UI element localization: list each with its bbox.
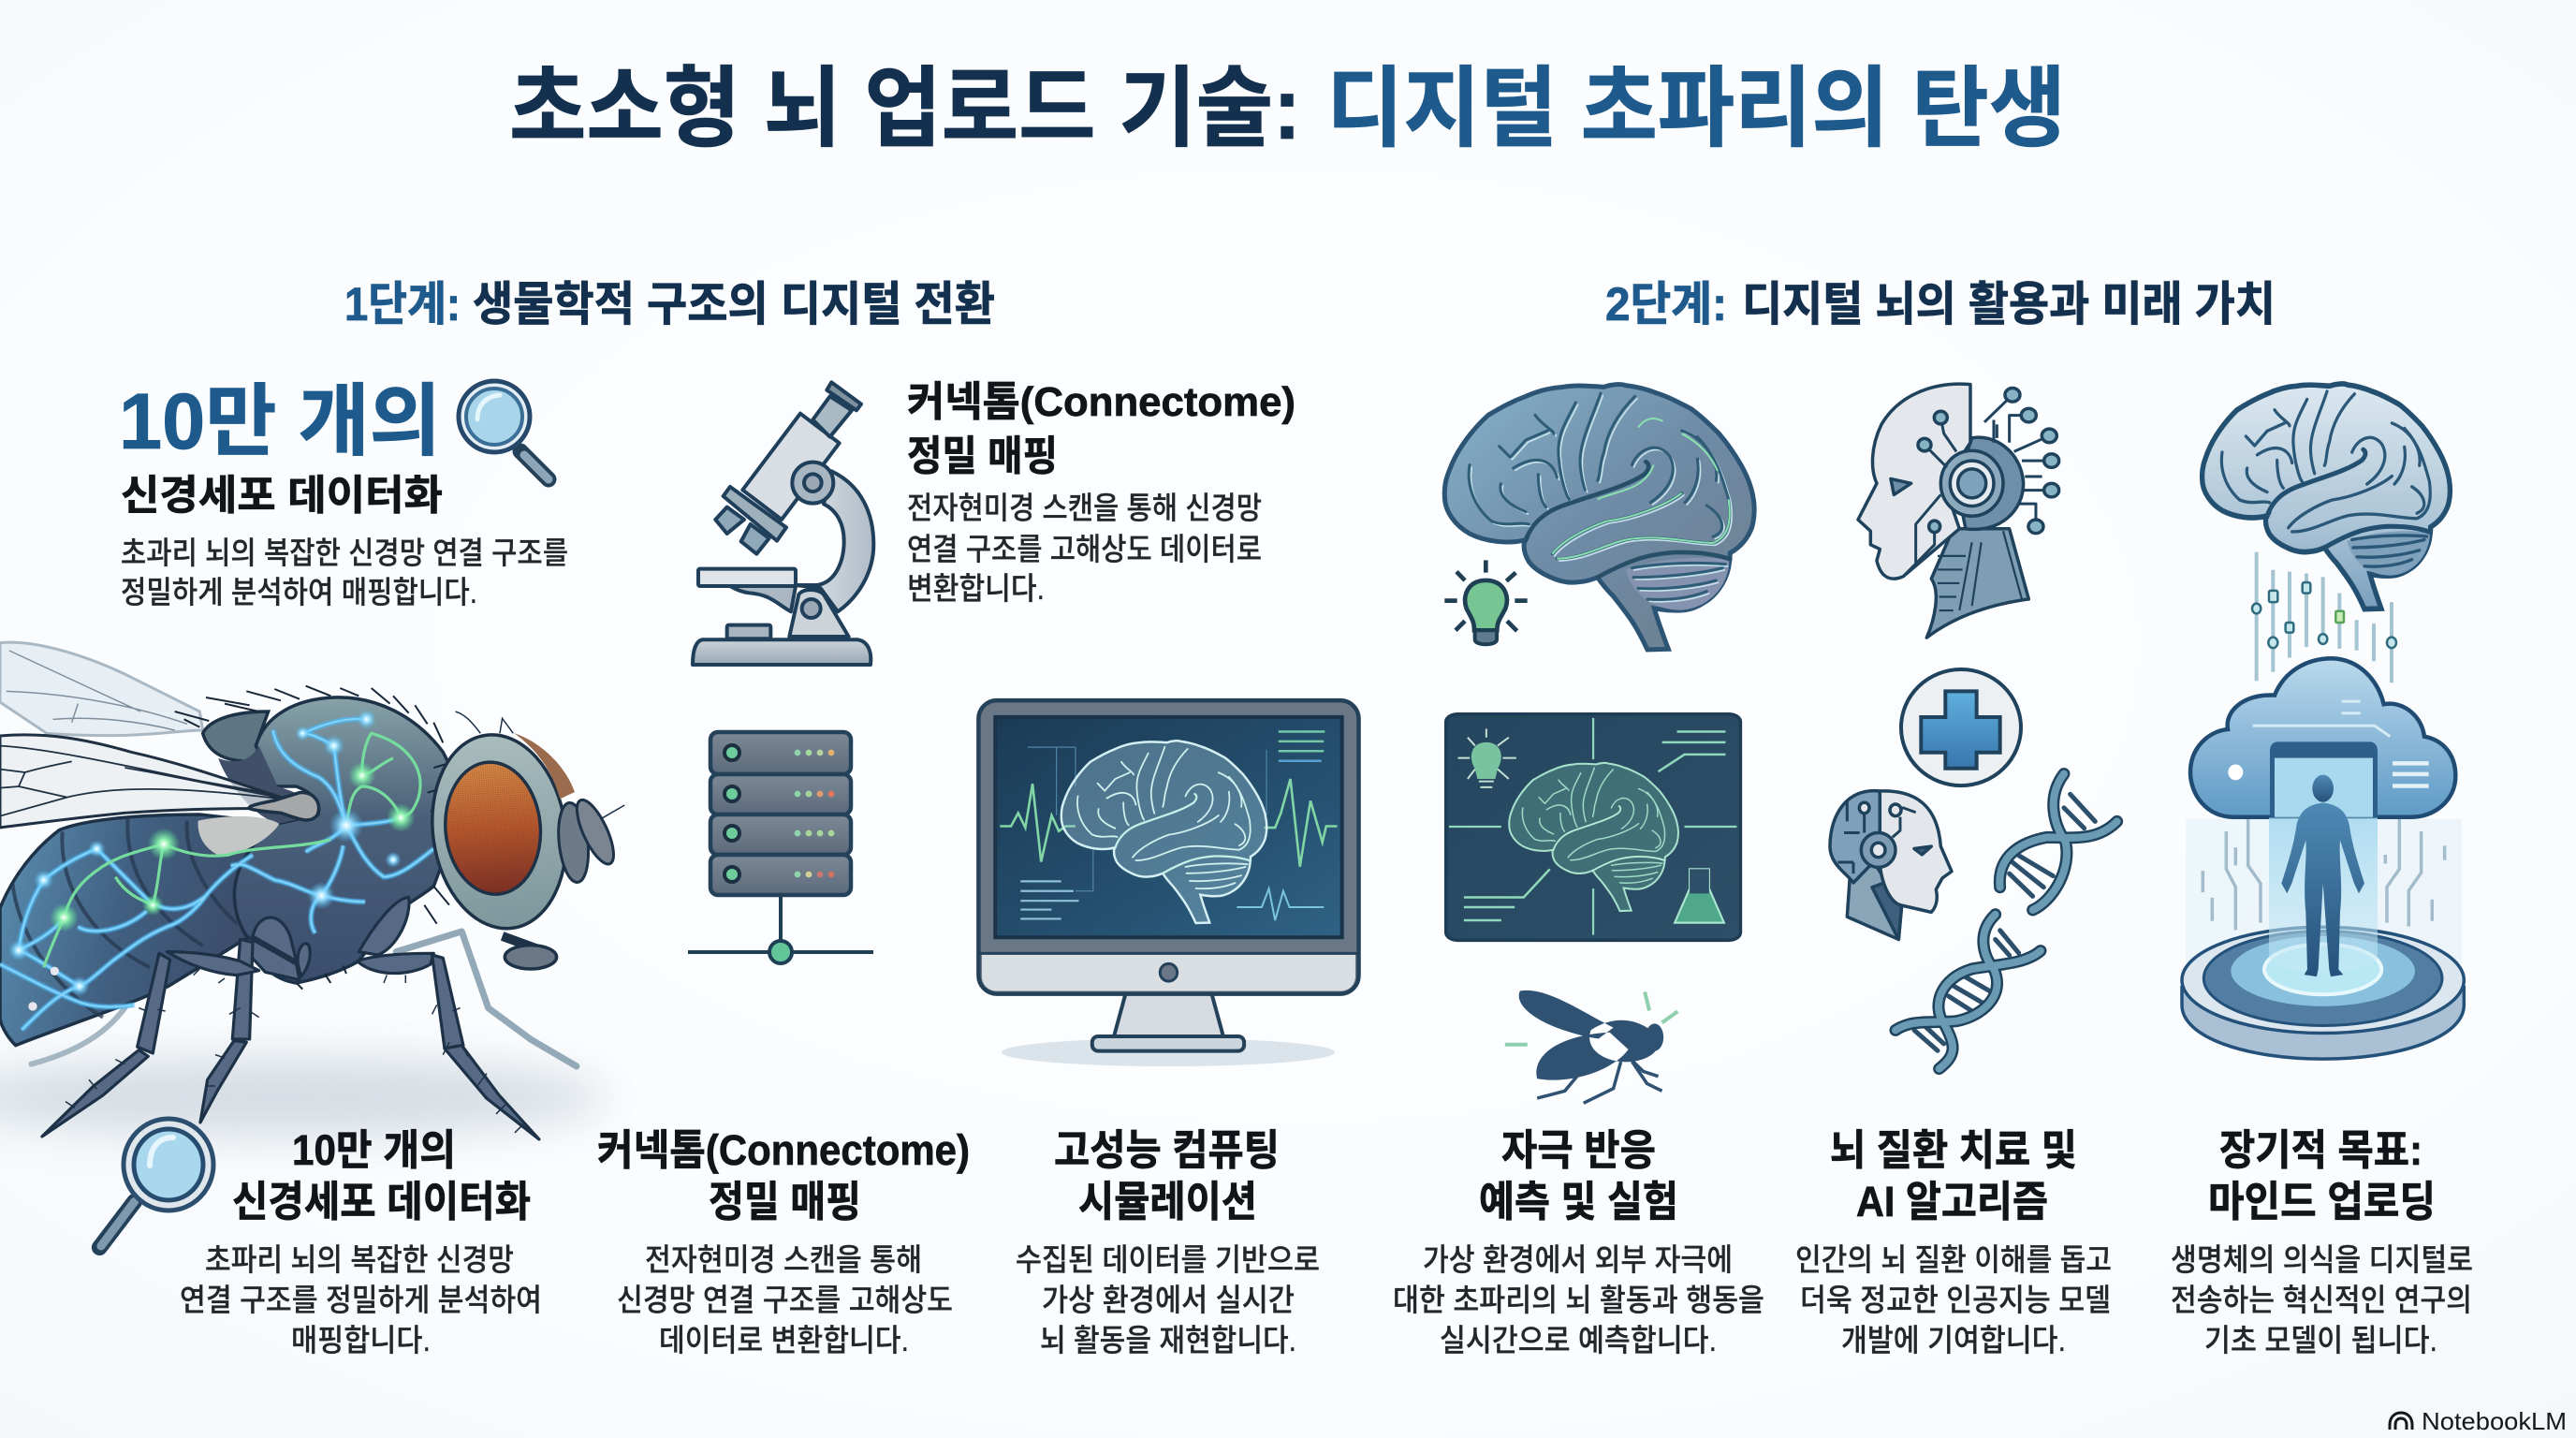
icon: fly silhouette	[1505, 990, 1677, 1103]
brain body	[2203, 384, 2450, 609]
stage	[698, 569, 796, 586]
objectives	[715, 507, 744, 534]
DNA strands	[1895, 774, 2117, 1069]
logo text: NotebookLM	[2422, 1407, 2567, 1435]
caption: prediction: 예측 및 실험	[1479, 1178, 1678, 1225]
text block: connectome top: 변환합니다.	[907, 571, 1045, 606]
upper wing	[0, 642, 203, 736]
DNA rungs	[1914, 794, 2095, 1050]
lens	[459, 381, 530, 452]
icon: cloud upload with person on platform	[2182, 658, 2464, 1059]
caption: neurons: 매핑합니다.	[291, 1323, 431, 1357]
status lights	[724, 745, 739, 882]
caption: mind uploading	[2171, 1126, 2473, 1357]
panel bulb	[1471, 742, 1501, 779]
icon: stimulation panel	[1446, 714, 1740, 940]
icon: DNA helices	[1895, 774, 2117, 1069]
title	[509, 59, 2066, 157]
fly ground shadow	[0, 1058, 608, 1137]
cloud details	[2253, 701, 2390, 737]
arm	[796, 471, 873, 611]
leg hairs	[66, 969, 524, 1133]
big stat: 10만 개의	[119, 377, 441, 465]
stand	[1114, 993, 1223, 1037]
icon: small AI head	[1830, 791, 1952, 939]
icon: microscope	[693, 382, 873, 665]
circuit traces	[2203, 818, 2445, 930]
caption: connectome	[597, 1126, 970, 1357]
icon: magnifier lower	[90, 1119, 213, 1248]
caption body: 초파리 뇌의 복잡한 신경망	[205, 1242, 514, 1277]
neuron nodes	[8, 710, 416, 1011]
ecg lower	[1237, 888, 1324, 920]
sulci	[1469, 393, 1730, 599]
center ring	[1940, 450, 2003, 516]
caption: therapy and AI: 개발에 기여합니다.	[1841, 1323, 2066, 1357]
caption: therapy and AI	[1795, 1126, 2112, 1357]
stage 2 heading text: 디지털 뇌의 활용과 미래 가치	[1742, 278, 2276, 330]
wing base knob	[249, 793, 319, 820]
circuit nodes	[1918, 389, 2059, 534]
stream beads	[2252, 582, 2396, 648]
pillar	[789, 590, 849, 637]
leg 3	[358, 953, 433, 974]
heading: stage 2	[1605, 278, 2276, 330]
head	[420, 726, 578, 937]
caption title: 장기적 목표:	[2219, 1126, 2422, 1174]
caption title: 10만 개의	[292, 1126, 456, 1174]
neck	[1926, 529, 2028, 638]
sulci	[2221, 391, 2430, 566]
brain on screen	[1061, 741, 1266, 923]
stage 2 label: 2단계:	[1605, 278, 1727, 330]
stat subtitle: 신경세포 데이터화	[121, 473, 443, 519]
heading: stage 1	[344, 278, 995, 330]
caption title: 뇌 질환 치료 및	[1830, 1126, 2077, 1174]
caption: computing: 시뮬레이션	[1078, 1178, 1257, 1225]
icon: monitor with brain	[978, 700, 1359, 1066]
cerebellum	[1626, 558, 1729, 610]
neck	[1847, 864, 1902, 939]
neuron glow blue	[0, 719, 433, 1030]
rear faded legs	[31, 932, 577, 1066]
lower wing	[0, 735, 306, 828]
data streams	[2252, 552, 2396, 682]
rays	[1444, 560, 1528, 631]
neuron branches blue	[0, 719, 433, 1030]
monitor shadow	[1002, 1038, 1335, 1066]
caption body: 생명체의 의식을 디지털로	[2171, 1242, 2473, 1277]
lens	[124, 1119, 213, 1211]
text block: connectome top	[907, 379, 1295, 606]
chin	[982, 954, 1355, 991]
text block: connectome top: 정밀 매핑	[907, 433, 1058, 479]
neuron branches green	[44, 733, 420, 967]
abdomen bands	[12, 817, 237, 1018]
text block: 100k neurons top: 정밀하게 분석하여 매핑합니다.	[121, 575, 477, 609]
green nerve lines	[1552, 418, 1730, 559]
connectome title: 커넥톰(Connectome)	[907, 379, 1295, 425]
icon: magnifier top	[459, 381, 549, 479]
caption: neurons: 연결 구조를 정밀하게 분석하여	[180, 1283, 542, 1317]
upload beam	[2269, 818, 2378, 973]
brow	[1914, 846, 1931, 855]
bristles	[175, 686, 456, 990]
tube	[742, 414, 840, 520]
bulb base	[1475, 630, 1497, 644]
caption: mind uploading: 기초 모델이 됩니다.	[2204, 1323, 2437, 1357]
eye	[1891, 478, 1911, 494]
focus knob	[792, 462, 833, 504]
caption: prediction	[1393, 1126, 1764, 1357]
caption body: 수집된 데이터를 기반으로	[1016, 1242, 1320, 1277]
stat description: 초과리 뇌의 복잡한 신경망 연결 구조를	[121, 536, 568, 570]
leg 2	[246, 936, 300, 980]
scutellum plate	[203, 712, 276, 789]
caption: neurons: 신경세포 데이터화	[232, 1178, 531, 1225]
title dark part: 초소형 뇌 업로드 기술:	[509, 59, 1301, 157]
femur upper	[359, 897, 409, 955]
ecg right	[1265, 779, 1338, 867]
illustration: fly with neural network	[0, 642, 624, 1139]
antennae	[555, 801, 592, 884]
ecg left	[1000, 784, 1076, 862]
handle	[520, 451, 549, 479]
caption: computing: 가상 환경에서 실시간	[1042, 1283, 1295, 1317]
caption: therapy and AI: 더욱 정교한 인공지능 모델	[1800, 1283, 2111, 1317]
caption: prediction: 실시간으로 예측합니다.	[1440, 1323, 1717, 1357]
gray patch	[198, 816, 279, 857]
flask	[1675, 869, 1724, 923]
icon: medical cross	[1901, 669, 2021, 785]
backdrop haze	[2186, 819, 2462, 962]
motion marks	[1505, 992, 1677, 1045]
data lines	[1279, 731, 1325, 751]
front legs	[42, 897, 539, 1139]
main fissure	[1526, 462, 1730, 578]
screen	[995, 717, 1342, 937]
caption: connectome: 데이터로 변환합니다.	[659, 1323, 909, 1357]
caption: therapy and AI: AI 알고리즘	[1856, 1178, 2048, 1225]
DNA outlines	[1895, 774, 2117, 1069]
caption title: 고성능 컴퓨팅	[1054, 1126, 1280, 1174]
cloud	[2190, 658, 2455, 817]
panel	[1446, 714, 1740, 940]
readout lines	[1464, 731, 1725, 920]
caption body: 가상 환경에서 외부 자극에	[1423, 1242, 1733, 1277]
caption: connectome: 신경망 연결 구조를 고해상도	[617, 1283, 953, 1317]
face	[1880, 791, 1952, 912]
glass	[1465, 580, 1507, 630]
face	[1858, 384, 1970, 579]
caption: connectome: 정밀 매핑	[709, 1178, 861, 1225]
compound eye	[440, 758, 546, 898]
logo icon	[2390, 1413, 2412, 1430]
text block: connectome top: 연결 구조를 고해상도 데이터로	[907, 532, 1262, 566]
stage 1 label: 1단계:	[344, 278, 461, 330]
caption body: 인간의 뇌 질환 이해를 돕고	[1795, 1242, 2112, 1277]
caption: computing: 뇌 활동을 재현합니다.	[1040, 1323, 1296, 1357]
caption: neurons	[180, 1126, 542, 1357]
caption body: 전자현미경 스캔을 통해	[645, 1242, 922, 1277]
icon: brain with green highlights	[1444, 385, 1754, 650]
circuit lines	[1903, 395, 2052, 577]
leg 1	[167, 952, 259, 976]
text block: 100k neurons top	[119, 377, 568, 609]
wings and body	[1519, 990, 1659, 1080]
caption: prediction: 대한 초파리의 뇌 활동과 행동을	[1393, 1283, 1764, 1317]
cross	[1921, 691, 2000, 769]
title blue part: 디지털 초파리의 탄생	[1326, 59, 2066, 157]
stage 1 heading text: 생물학적 구조의 디지털 전환	[473, 278, 995, 330]
legs	[1537, 1057, 1662, 1103]
cerebellum	[2347, 531, 2430, 576]
icon: brain (upper right)	[2203, 384, 2450, 609]
handle	[90, 1201, 144, 1248]
icon: server rack	[688, 732, 873, 963]
panel brain	[1509, 763, 1678, 911]
coxae	[253, 917, 297, 961]
person	[2281, 775, 2364, 976]
NotebookLM mark	[2390, 1407, 2567, 1435]
base	[693, 639, 871, 665]
connector	[688, 894, 873, 952]
wing veins	[0, 746, 281, 816]
stream bars	[2257, 552, 2392, 682]
under stage wedge	[730, 586, 796, 611]
icon: light bulb	[1444, 560, 1528, 644]
cross badge	[1901, 669, 2021, 785]
platform side	[2182, 988, 2464, 1059]
skull panel	[1830, 791, 1880, 883]
caption: mind uploading: 마인드 업로딩	[2208, 1178, 2436, 1225]
server units	[710, 732, 851, 774]
platform top	[2182, 927, 2464, 1034]
abdomen	[0, 814, 281, 1046]
circuit	[1837, 801, 1916, 873]
caption title: 자극 반응	[1501, 1126, 1656, 1174]
ear ring	[1861, 833, 1895, 867]
bezel	[978, 700, 1359, 994]
caption: mind uploading: 전송하는 혁신적인 연구의	[2171, 1283, 2472, 1317]
connectome description: 전자현미경 스캔을 통해 신경망	[907, 491, 1262, 525]
device	[2270, 741, 2378, 817]
light highlights	[1471, 395, 1732, 602]
proboscis	[503, 936, 536, 948]
objective collar	[724, 487, 786, 541]
brown crown	[514, 733, 575, 799]
caption title: 커넥톰(Connectome)	[597, 1126, 970, 1174]
crosshair	[1449, 718, 1736, 935]
thorax	[234, 697, 449, 983]
icon: AI head with circuits	[1858, 384, 2059, 638]
skull back panel	[1956, 437, 2024, 529]
caption: computing	[1016, 1126, 1320, 1357]
main fissure	[2267, 449, 2431, 548]
brain body	[1444, 385, 1754, 650]
